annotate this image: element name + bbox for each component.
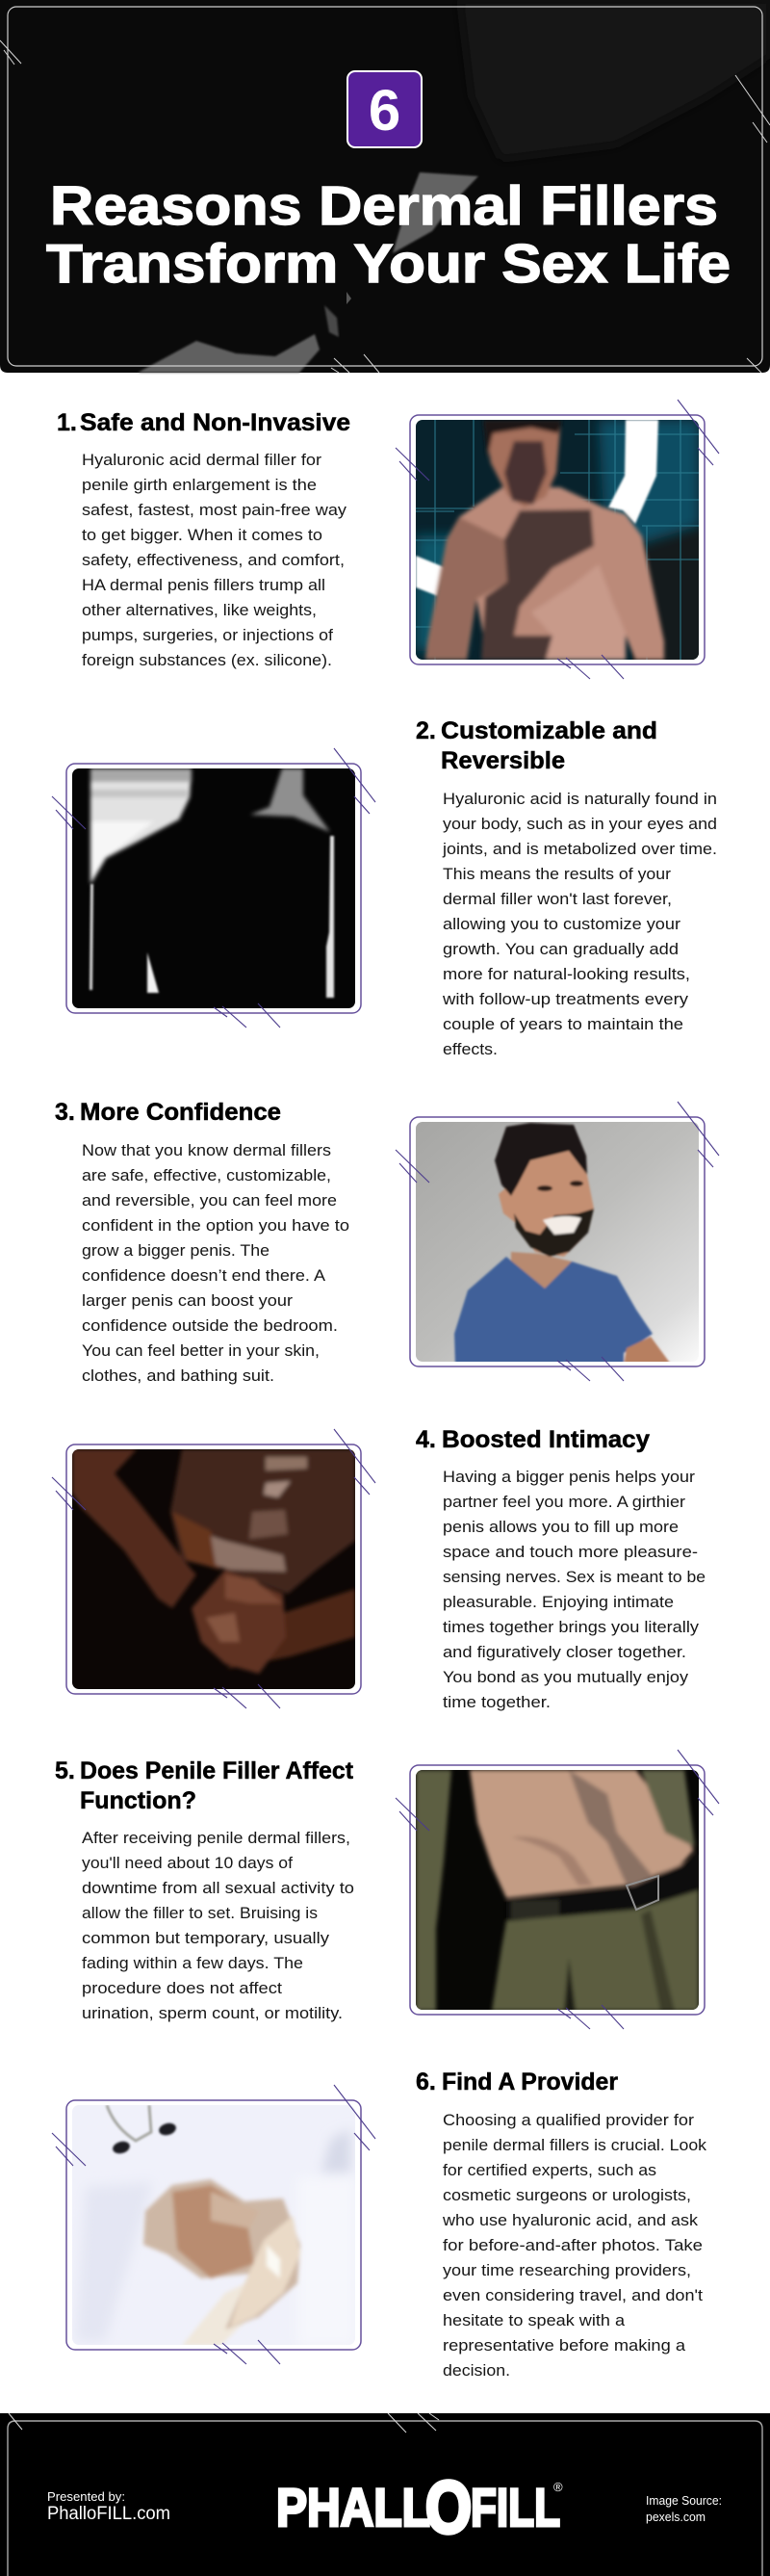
PhalloFILL logo: ® [553, 2480, 563, 2494]
section 6 body: for before-and-after photos. Take [443, 2237, 703, 2254]
section 4 body: and figuratively closer together. [443, 1644, 686, 1661]
photo 3: smiling man in blue t-shirt [396, 1102, 719, 1381]
section 3 body: confidence outside the bedroom. [82, 1317, 338, 1335]
section 1 body: HA dermal penis fillers trump all [82, 577, 325, 594]
section 3 heading: 3. [55, 1099, 75, 1126]
section 2 body: effects. [443, 1041, 498, 1058]
section 4 body: times together brings you literally [443, 1619, 700, 1636]
section 1 body [82, 452, 347, 669]
section 6 body: for certified experts, such as [443, 2162, 656, 2179]
section 1 body: safest, fastest, most pain-free way [82, 502, 347, 519]
footer banner [0, 2413, 770, 2576]
photo 2: black and white silhouette [52, 748, 375, 1028]
section 3 body: confident in the option you have to [82, 1217, 349, 1235]
section 5 body [82, 1830, 354, 2022]
section 5 body: common but temporary, usually [82, 1930, 330, 1947]
section 3 body: larger penis can boost your [82, 1292, 294, 1310]
image source credit: Image Source: [646, 2493, 722, 2508]
photo 6: gloved hand and white coat [52, 2085, 375, 2364]
section 2 heading [416, 717, 657, 774]
section 1 body: pumps, surgeries, or injections of [82, 627, 333, 644]
presented by credit [47, 2489, 170, 2524]
title: Transform Your Sex Life [46, 233, 731, 295]
section 3 body: grow a bigger penis. The [82, 1242, 270, 1260]
section 6 body: cosmetic surgeons or urologists, [443, 2187, 691, 2204]
section 5 text [55, 1757, 354, 2022]
section 3 body: Now that you know dermal fillers [82, 1142, 331, 1159]
section 1 text [57, 409, 350, 669]
section 1 body: Hyaluronic acid dermal filler for [82, 452, 322, 469]
section 6 body [442, 2112, 707, 2380]
photo 4: muscular torso and clasped hands [52, 1429, 375, 1708]
title: Reasons Dermal Fillers [50, 175, 718, 237]
section 1 body: to get bigger. When it comes to [82, 527, 322, 544]
section 2 body: more for natural-looking results, [443, 966, 690, 983]
header background photo [138, 0, 770, 373]
section 6 body: penile dermal fillers is crucial. Look [443, 2137, 707, 2154]
section 2 heading: 2. [416, 717, 436, 744]
PhalloFILL logo [276, 2467, 563, 2549]
header inner frame [8, 7, 762, 366]
section 6 heading: 6. [416, 2069, 436, 2095]
section 6 body: representative before making a [443, 2337, 686, 2355]
section 6 heading: Find A Provider [442, 2069, 618, 2095]
header accent lines [0, 40, 770, 373]
section 5 body: fading within a few days. The [82, 1955, 303, 1972]
section 6 body: even considering travel, and don't [443, 2287, 703, 2304]
number badge [347, 71, 422, 147]
section 6 body: who use hyaluronic acid, and ask [442, 2212, 699, 2229]
footer inner frame [8, 2421, 762, 2576]
section 3 body [82, 1142, 349, 1385]
photo 1: shirtless man with neon ring [396, 400, 719, 679]
section 6 body: Choosing a qualified provider for [443, 2112, 695, 2129]
section 2 body: growth. You can gradually add [443, 941, 679, 958]
section 6 body: decision. [443, 2362, 510, 2380]
section 4 body: You bond as you mutually enjoy [443, 1669, 689, 1686]
PhalloFILL logo: FILL [471, 2477, 560, 2537]
section 5 body: downtime from all sexual activity to [82, 1880, 354, 1897]
number badge: 6 [369, 78, 400, 143]
section 4 body: partner feel you more. A girthier [443, 1494, 686, 1511]
section 5 body: you'll need about 10 days of [82, 1855, 293, 1872]
section 5 heading [55, 1757, 354, 1814]
section 2 heading: Customizable and [441, 717, 657, 744]
section 1 body: other alternatives, like weights, [82, 602, 317, 619]
section 6 text [416, 2069, 707, 2380]
section 4 body: sensing nerves. Sex is meant to be [443, 1569, 706, 1586]
section 1 body: penile girth enlargement is the [82, 477, 317, 494]
section 4 body: pleasurable. Enjoying intimate [443, 1594, 674, 1611]
section 3 heading: More Confidence [80, 1099, 281, 1126]
section 4 heading: 4. [416, 1426, 436, 1453]
section 5 body: urination, sperm count, or motility. [82, 2005, 343, 2022]
section 3 body: clothes, and bathing suit. [82, 1367, 274, 1385]
section 4 heading: Boosted Intimacy [442, 1426, 650, 1453]
section 2 body: with follow-up treatments every [442, 991, 689, 1008]
section 2 body [442, 791, 717, 1058]
header banner [0, 0, 770, 373]
footer accent lines [9, 2413, 439, 2433]
section 4 body [443, 1469, 706, 1711]
section 2 body: joints, and is metabolized over time. [442, 841, 717, 858]
section 2 body: allowing you to customize your [443, 916, 681, 933]
section 2 heading: Reversible [441, 747, 565, 774]
section 4 text [416, 1426, 706, 1711]
PhalloFILL logo: PHALL [276, 2477, 430, 2537]
section 4 body: penis allows you to fill up more [443, 1519, 679, 1536]
section 5 body: After receiving penile dermal fillers, [82, 1830, 350, 1847]
presented by credit: Presented by: [47, 2489, 125, 2504]
section 1 body: safety, effectiveness, and comfort, [82, 552, 345, 569]
section 6 body: your time researching providers, [443, 2262, 691, 2279]
section 5 heading: 5. [55, 1757, 75, 1784]
section 6 body: hesitate to speak with a [443, 2312, 626, 2329]
photo 5: torso with belt and olive trousers [396, 1750, 719, 2029]
section 4 body: time together. [443, 1694, 551, 1711]
title [46, 175, 731, 295]
section 2 body: your body, such as in your eyes and [443, 816, 717, 833]
section 5 heading: Function? [80, 1787, 196, 1814]
presented by credit: PhalloFILL.com [47, 2504, 170, 2524]
section 4 body: space and touch more pleasure- [443, 1544, 698, 1561]
section 3 body: You can feel better in your skin, [82, 1342, 320, 1360]
image source credit [646, 2493, 722, 2524]
section 2 body: dermal filler won't last forever, [443, 891, 672, 908]
section 5 body: allow the filler to set. Bruising is [82, 1905, 318, 1922]
section 3 text [55, 1099, 349, 1385]
section 2 text [416, 717, 717, 1058]
section 2 body: Hyaluronic acid is naturally found in [443, 791, 717, 808]
section 2 body: couple of years to maintain the [443, 1016, 683, 1033]
PhalloFILL logo: O [425, 2467, 472, 2549]
section 1 heading: 1. [57, 409, 77, 436]
section 5 body: procedure does not affect [82, 1980, 282, 1997]
section 1 heading: Safe and Non-Invasive [80, 409, 350, 436]
section 5 heading: Does Penile Filler Affect [80, 1757, 354, 1784]
image source credit: pexels.com [646, 2510, 706, 2524]
section 3 body: are safe, effective, customizable, [82, 1167, 331, 1184]
section 3 body: and reversible, you can feel more [82, 1192, 337, 1210]
section 2 body: This means the results of your [443, 866, 672, 883]
section 4 body: Having a bigger penis helps your [443, 1469, 696, 1486]
section 1 body: foreign substances (ex. silicone). [82, 652, 332, 669]
section 3 body: confidence doesn’t end there. A [82, 1267, 325, 1285]
